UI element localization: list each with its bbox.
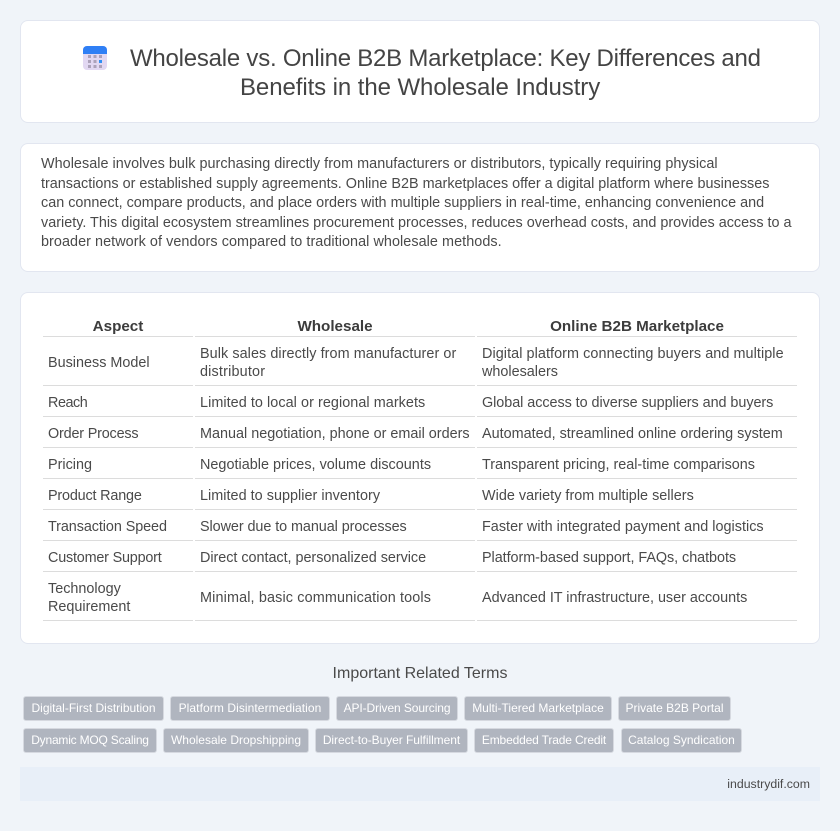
tag xyxy=(618,696,731,721)
row: Technology Requirement xyxy=(48,581,130,615)
tag xyxy=(23,728,157,753)
comparison table: Direct contact, personalized service xyxy=(200,550,426,566)
tag xyxy=(336,696,458,721)
comparison table: Slower due to manual processes xyxy=(200,519,407,535)
row: Order Process: Order Process xyxy=(48,426,138,442)
panel: introduction xyxy=(20,143,820,272)
title: Wholesale vs. Online B2B Marketplace: Key Differences and xyxy=(130,45,761,72)
tag: Direct-to-Buyer Fulfillment xyxy=(323,733,460,747)
tag xyxy=(621,728,742,753)
related term tags xyxy=(23,696,742,753)
heading: related terms: Important Related Terms xyxy=(333,665,507,682)
comparison table: Limited to supplier inventory xyxy=(200,488,380,504)
comparison table: distributor xyxy=(200,364,265,380)
comparison table: Limited to local or regional markets xyxy=(200,395,425,411)
tag xyxy=(474,728,614,753)
comparison table: Transparent pricing, real-time comparisons xyxy=(482,457,755,473)
row: Product Range: Product Range xyxy=(48,488,142,504)
title: Benefits in the Wholesale Industry xyxy=(240,74,600,101)
tag: Wholesale Dropshipping xyxy=(171,733,301,747)
comparison table: wholesalers xyxy=(482,364,558,380)
row: Reach: Reach xyxy=(48,395,87,411)
intro text: Wholesale involves bulk purchasing directly from manufacturers or distributors, typically requiring physical xyxy=(41,156,718,172)
tag: Platform Disintermediation xyxy=(179,701,321,715)
intro text: broader network of vendors compared to traditional wholesale methods. xyxy=(41,234,502,250)
intro text: transactions or established supply agreements. Online B2B marketplaces offer a digital platform where businesses xyxy=(41,176,769,192)
icon: calendar grid xyxy=(83,46,107,70)
row: Transaction Speed: Transaction Speed xyxy=(48,519,167,535)
header: Aspect: Aspect xyxy=(93,318,143,335)
row: Business Model: Business Model xyxy=(48,355,150,371)
comparison table: Minimal, basic communication tools xyxy=(200,590,431,606)
tag xyxy=(464,696,612,721)
tag: API-Driven Sourcing xyxy=(344,701,450,715)
footer source text: industrydif.com xyxy=(727,777,810,791)
tag: Digital-First Distribution xyxy=(31,701,156,715)
comparison table: Wide variety from multiple sellers xyxy=(482,488,694,504)
intro text: can connect, compare products, and place orders with multiple suppliers in real-time, enhancing convenience and xyxy=(41,195,764,211)
tag: Dynamic MOQ Scaling xyxy=(31,733,149,747)
comparison table: Advanced IT infrastructure, user accounts xyxy=(482,590,747,606)
row: Technology Requirement: Requirement xyxy=(48,599,130,615)
title xyxy=(130,45,761,101)
tag: Private B2B Portal xyxy=(625,701,724,715)
panel: title card xyxy=(20,20,820,123)
comparison table: Bulk sales directly from manufacturer or xyxy=(200,346,456,362)
comparison table: Platform-based support, FAQs, chatbots xyxy=(482,550,736,566)
tag xyxy=(23,696,164,721)
footer bar xyxy=(20,767,820,801)
header: Wholesale: Wholesale xyxy=(297,318,373,335)
tag: Multi-Tiered Marketplace xyxy=(472,701,604,715)
row: Customer Support: Customer Support xyxy=(48,550,162,566)
row: Pricing: Pricing xyxy=(48,457,92,473)
intro text: variety. This digital ecosystem streamlines procurement processes, reduces overhead costs, and provides access to a xyxy=(41,215,792,231)
tag xyxy=(170,696,330,721)
tag: Embedded Trade Credit xyxy=(482,733,606,747)
comparison table: Faster with integrated payment and logistics xyxy=(482,519,764,535)
tag: Catalog Syndication xyxy=(628,733,735,747)
header: Online B2B Marketplace: Online B2B Marketplace xyxy=(550,318,724,335)
panel: comparison table xyxy=(20,292,820,644)
comparison table: Global access to diverse suppliers and buyers xyxy=(482,395,773,411)
tag xyxy=(163,728,309,753)
intro text xyxy=(41,156,792,250)
row: Technology Requirement: Technology xyxy=(48,581,121,597)
comparison table: Digital platform connecting buyers and multiple xyxy=(482,346,784,362)
comparison table: Negotiable prices, volume discounts xyxy=(200,457,431,473)
tag xyxy=(315,728,468,753)
comparison table: Manual negotiation, phone or email orders xyxy=(200,426,470,442)
comparison table: Automated, streamlined online ordering system xyxy=(482,426,783,442)
